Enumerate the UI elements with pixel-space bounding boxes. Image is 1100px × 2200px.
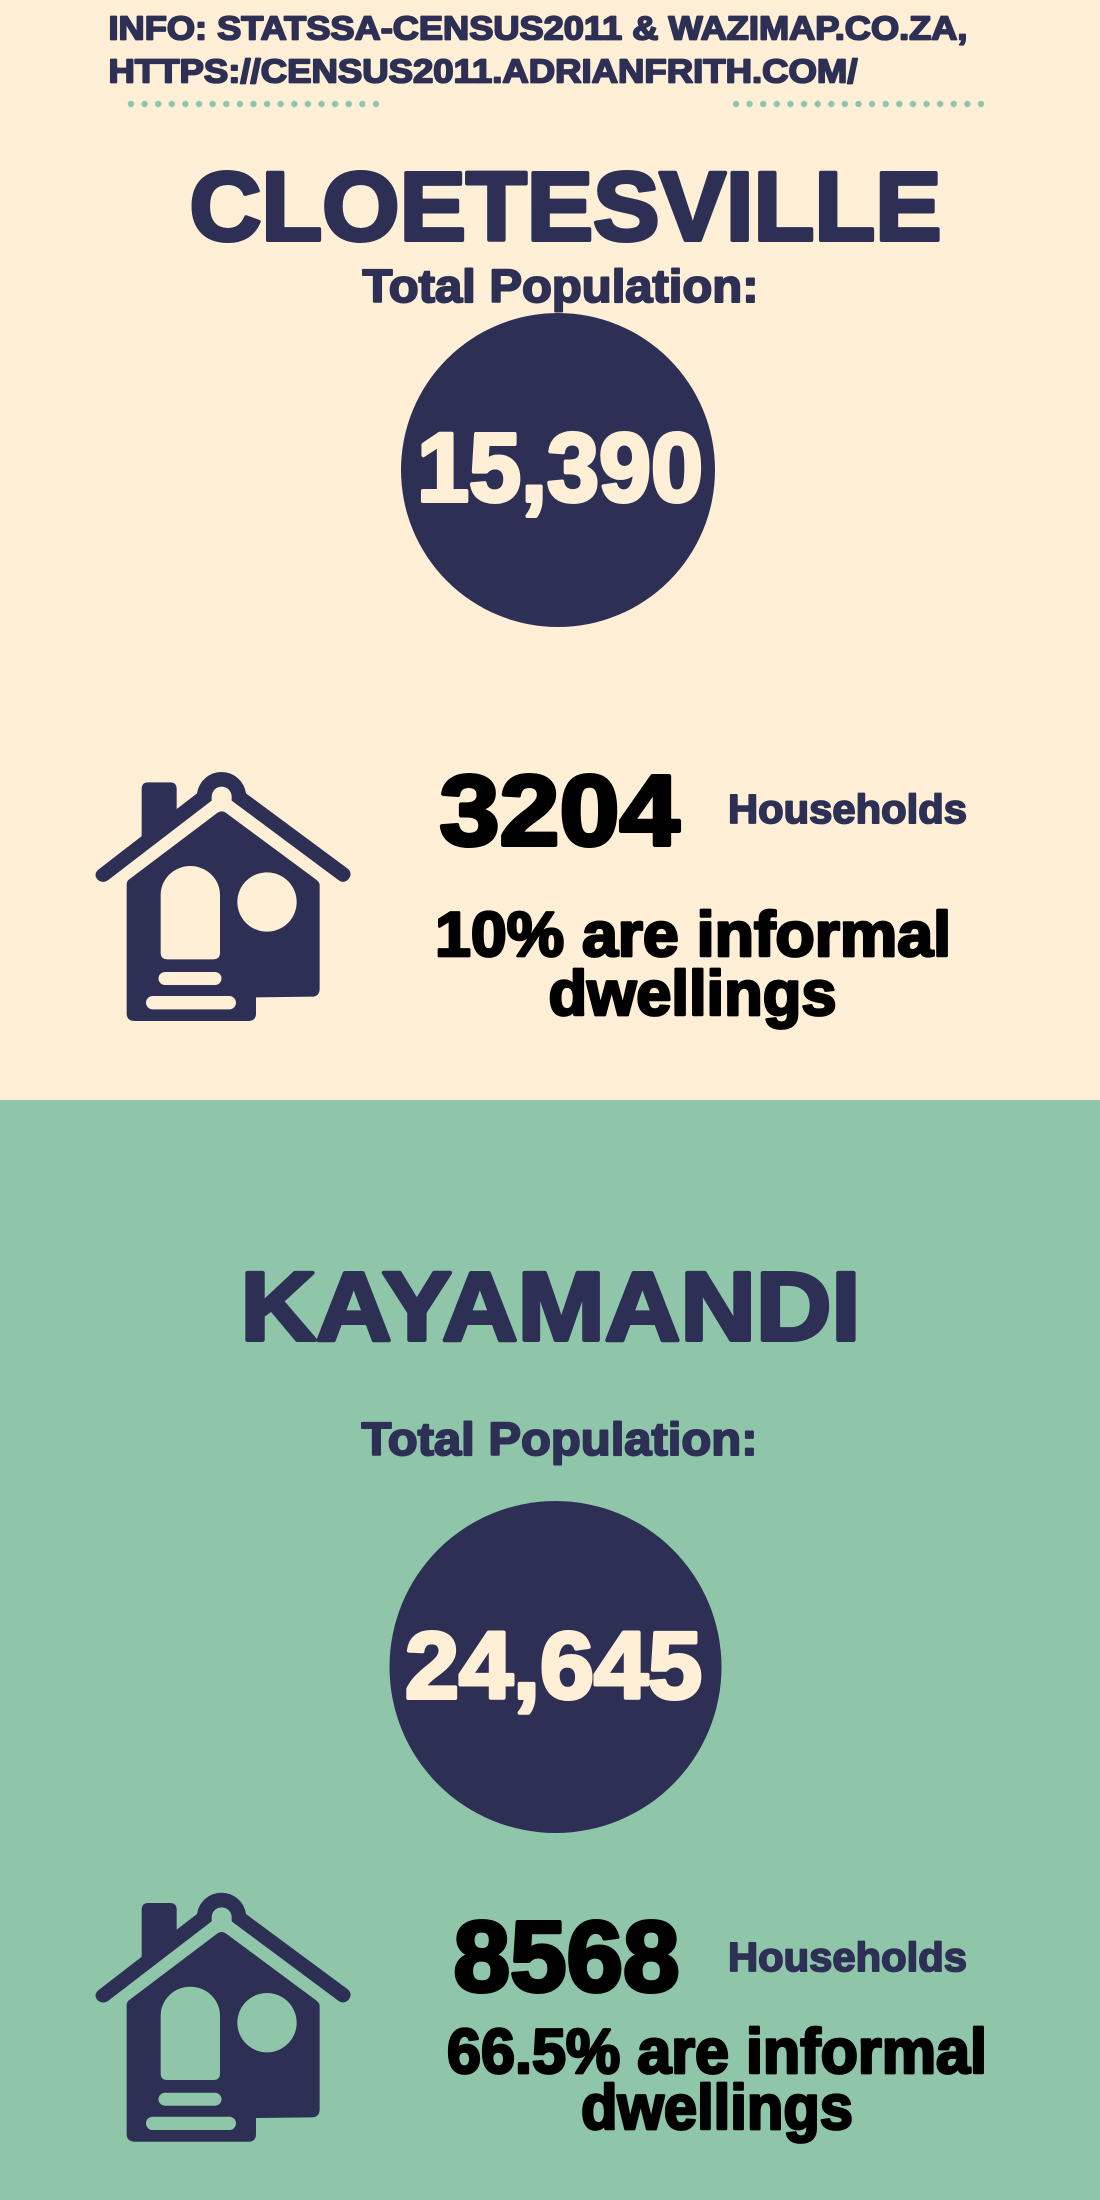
title: Cloetesville: CLOETESVILLE — [190, 152, 941, 261]
stat: informal dwellings: dwellings — [581, 2073, 853, 2143]
stat: informal dwellings: 10% are informal — [435, 900, 951, 970]
icon: house — [96, 772, 351, 1021]
stat: informal dwellings — [447, 2017, 987, 2143]
source credits: HTTPS://CENSUS2011.ADRIANFRITH.COM/ — [108, 52, 858, 90]
label: total population: Total Population: — [362, 260, 758, 312]
dotted accent: left — [131, 101, 376, 107]
panel: Cloetesville — [0, 0, 1100, 1100]
stat: informal dwellings: dwellings — [548, 959, 836, 1029]
population circle: 15,390 — [417, 413, 703, 522]
stat: informal dwellings: 66.5% are informal — [447, 2017, 987, 2087]
title: Kayamandi: KAYAMANDI — [240, 1252, 860, 1361]
stat: households count: 8568 — [454, 1901, 680, 2013]
icon: house — [96, 1893, 351, 2142]
population circle — [401, 313, 715, 627]
panel: Kayamandi — [0, 1100, 1100, 2200]
dotted accent: right — [736, 101, 981, 107]
population circle: 24,645 — [405, 1613, 702, 1719]
label: total population: Total Population: — [362, 1413, 758, 1465]
stat: informal dwellings — [435, 900, 951, 1029]
source credits: INFO: STATSSA-CENSUS2011 & WAZIMAP.CO.ZA, — [108, 10, 968, 46]
source credits — [108, 10, 968, 90]
population circle — [390, 1501, 722, 1833]
label: households: Households — [728, 1934, 967, 1980]
stat: households count: 3204 — [440, 755, 680, 867]
label: households: Households — [728, 786, 967, 832]
